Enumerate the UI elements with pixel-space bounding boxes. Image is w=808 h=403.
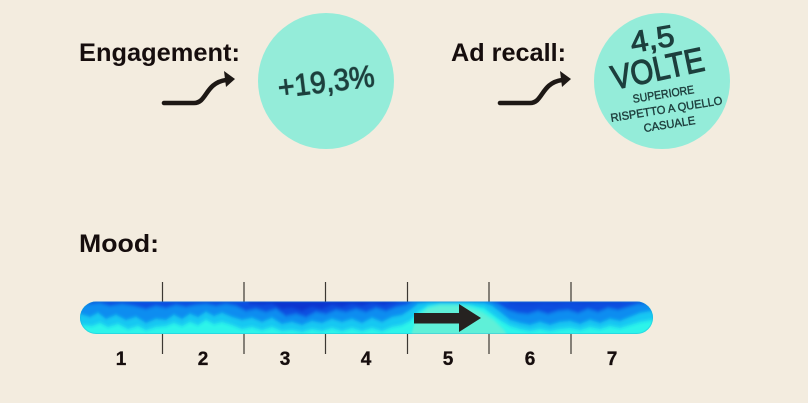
icon: engagement rising arrow [164,71,235,103]
number 3: 3 [280,349,290,370]
circle: engagement value [258,13,394,149]
mood waveform bar [80,302,653,334]
heading: Engagement: Engagement: [79,39,240,67]
heading: Mood: Mood: [79,230,159,258]
number 1: 1 [116,349,127,370]
number 7: 7 [607,349,617,370]
value: +19,3%: +19,3% [276,58,376,105]
icon: ad recall rising arrow [500,71,571,103]
number 5: 5 [443,349,454,370]
number 6: 6 [525,349,535,370]
caption line: CASUALE: CASUALE [643,115,696,135]
mood scale numbers [116,349,617,370]
circle: ad recall value [594,13,730,149]
mood scale tick marks [162,282,571,354]
number 2: 2 [198,349,208,370]
caption line: SUPERIORE: SUPERIORE [632,84,695,106]
caption line: RISPETTO A QUELLO: RISPETTO A QUELLO [610,95,723,125]
vertical waveform streaks [80,304,653,332]
number 4: 4 [361,349,372,370]
value: VOLTE: VOLTE [608,41,708,98]
bar outline [80,302,652,334]
value: 4,5: 4,5 [628,20,677,60]
heading: Ad recall: Ad recall: [451,39,566,67]
icon: mood marker arrow [414,304,481,332]
